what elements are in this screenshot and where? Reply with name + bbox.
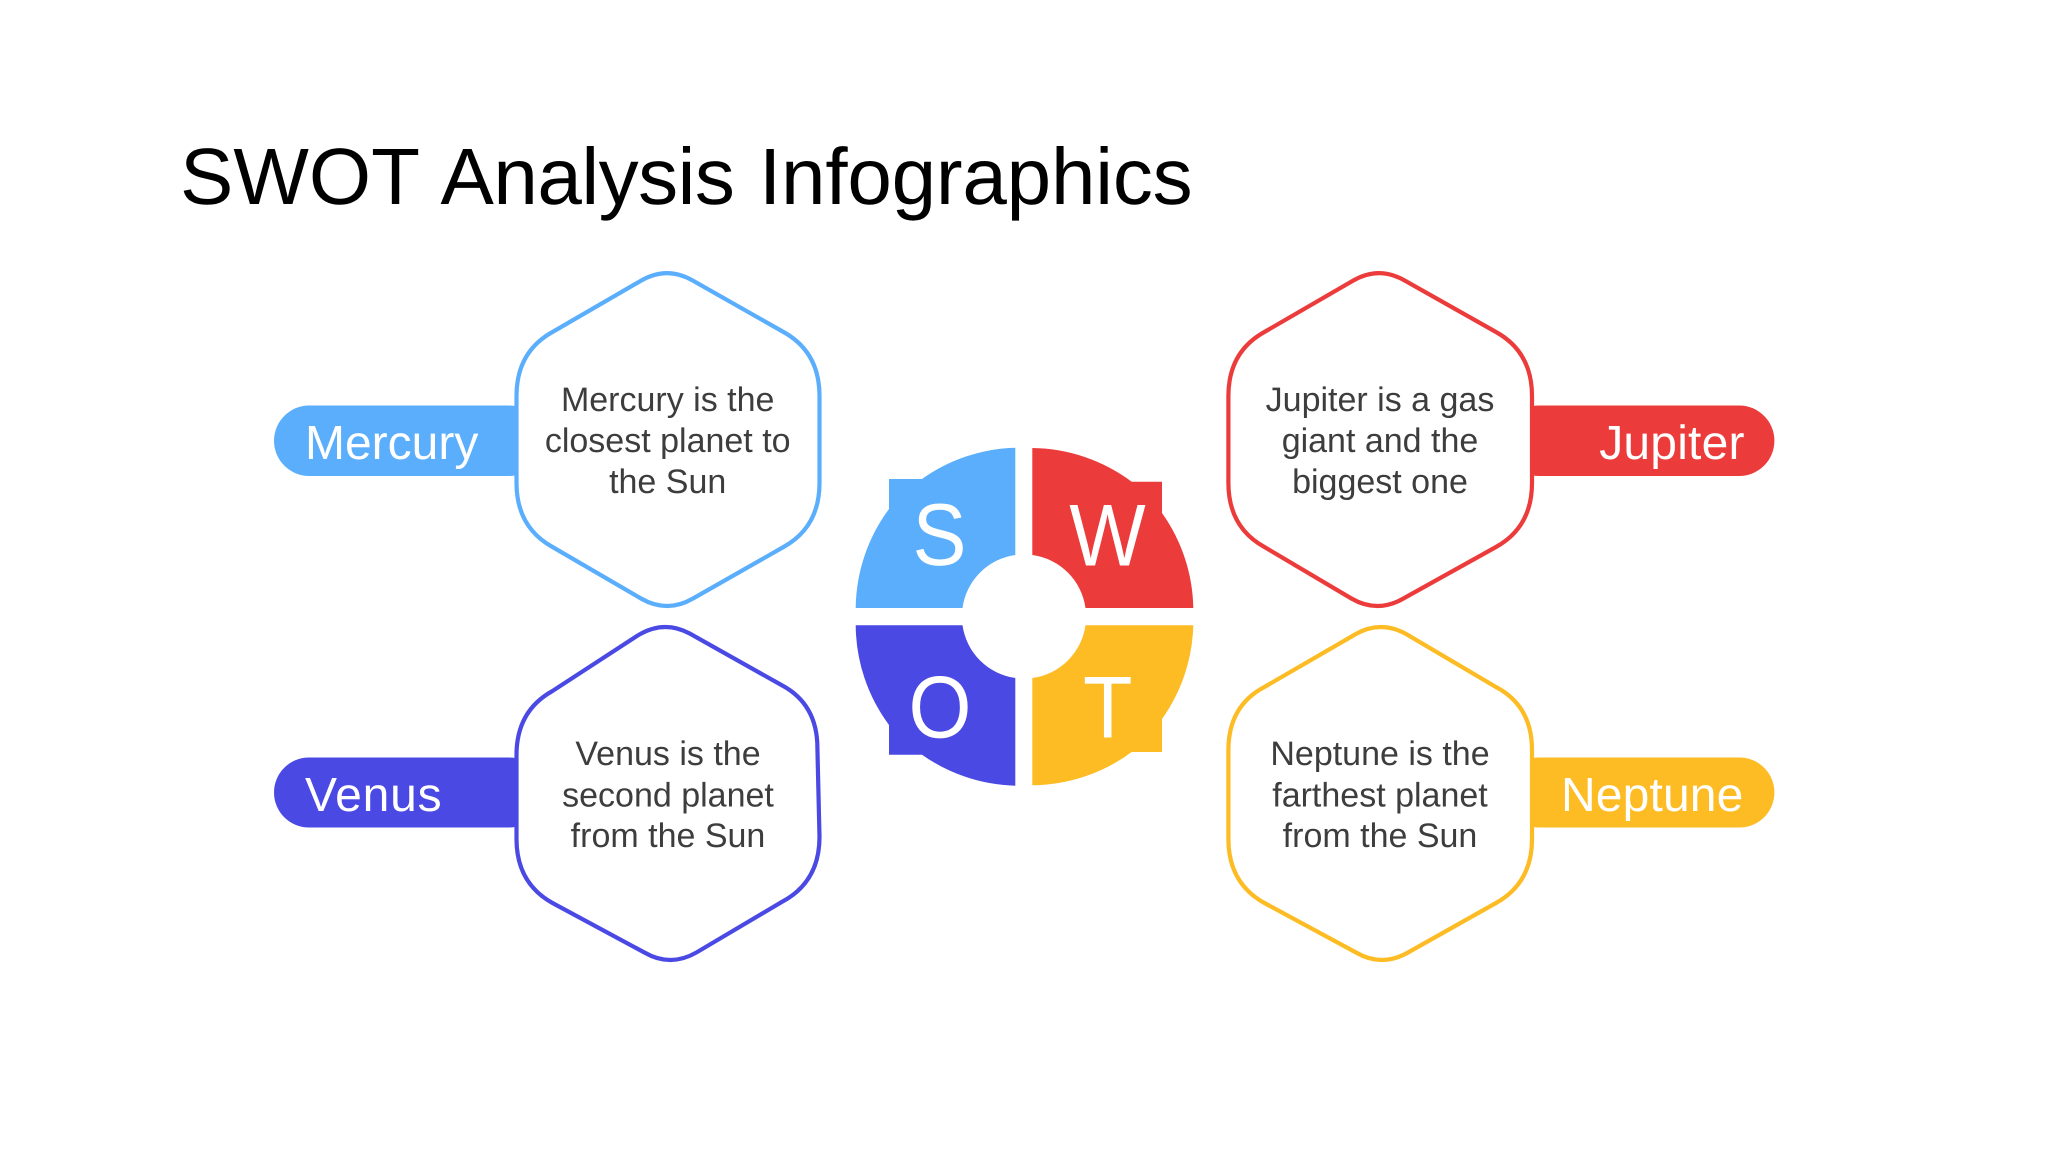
segment: S: S [912,485,967,584]
hexagon: Neptune [1228,627,1532,960]
title: Analysis [440,132,734,221]
text: Venus description: second planet [562,776,774,814]
panel: Venus (opportunity) [274,627,820,960]
text: Mercury description: the Sun [609,463,726,501]
hexagon: Mercury [516,273,820,606]
panel: Jupiter (weakness) [1228,273,1774,606]
panel: Neptune (threat) [1228,627,1774,960]
segment: O: O [909,658,971,756]
title: SWOT [180,132,420,221]
text: Venus description: Venus is the [575,735,761,773]
panel: Mercury (strength) [274,273,820,606]
segment: T: T [1083,658,1132,756]
text: Venus description: from the Sun [571,817,765,855]
pill: Mercury [274,406,544,476]
segment: W [1032,448,1193,608]
text: Mercury description: closest planet to [545,422,791,460]
segment: T [1032,625,1193,785]
text: Mercury description: Mercury is the [561,381,774,419]
segment: O [856,625,1015,786]
pill: Jupiter [1504,406,1774,476]
text: Jupiter description: giant and the [1282,422,1478,460]
chart: SWOT wheel [856,448,1193,786]
label: Neptune: Neptune [1561,769,1744,822]
title: Infographics [759,132,1192,221]
segment: W: W [1069,486,1146,584]
text: Neptune description: from the Sun [1283,817,1477,855]
pill: Venus [274,758,544,828]
label: Jupiter: Jupiter [1599,417,1745,470]
pill: Neptune [1504,758,1774,828]
text: Neptune description: Neptune is the [1270,735,1490,773]
label: Mercury: Mercury [305,417,478,470]
text: Jupiter description: Jupiter is a gas [1266,381,1494,419]
label: Venus: Venus [305,769,442,822]
text: Jupiter description: biggest one [1292,463,1468,501]
segment: S [856,448,1015,608]
text: Neptune description: farthest planet [1272,776,1488,814]
hexagon: Jupiter [1228,273,1532,606]
hexagon: Venus [516,627,820,960]
